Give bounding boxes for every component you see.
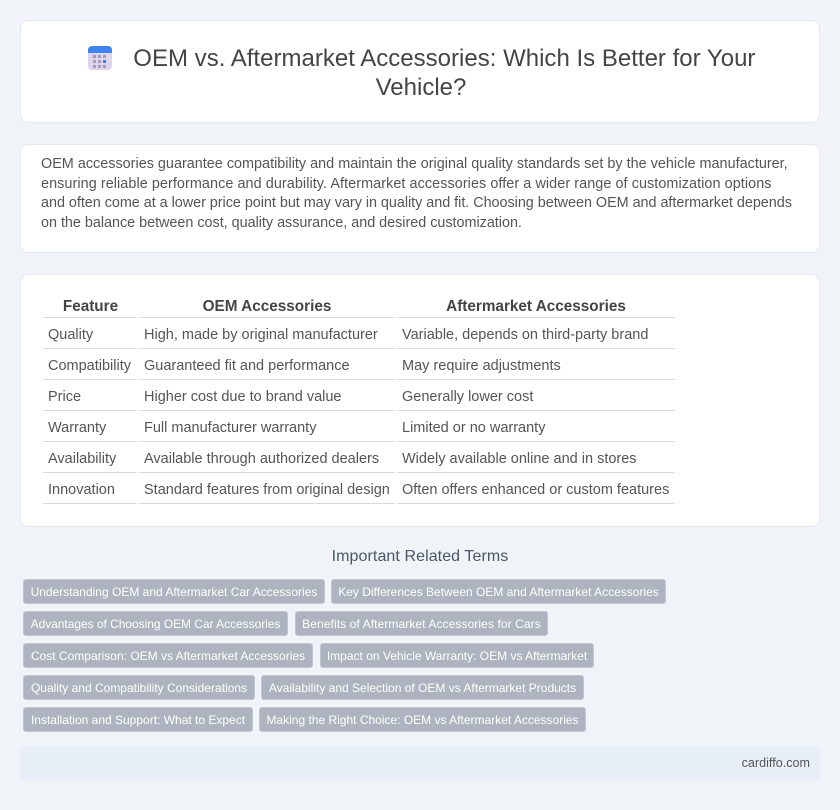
table: OEM vs aftermarket: Generally lower cost — [402, 389, 533, 405]
tag: Cost Comparison: OEM vs Aftermarket Accessories — [31, 649, 305, 663]
tag: Quality and Compatibility Considerations — [31, 681, 247, 695]
tag — [261, 675, 584, 700]
title: OEM vs. Aftermarket Accessories: Which Is Better for Your — [133, 45, 755, 72]
tag: Advantages of Choosing OEM Car Accessories — [31, 617, 280, 631]
tag — [23, 643, 313, 668]
tag — [320, 643, 594, 668]
tag — [23, 707, 253, 732]
table: OEM vs aftermarket: High, made by original manufacturer — [144, 327, 378, 343]
table: OEM vs aftermarket: Standard features from original design — [144, 482, 390, 498]
tag: Understanding OEM and Aftermarket Car Accessories — [31, 585, 317, 599]
tag list: related terms — [23, 579, 666, 732]
tag: Benefits of Aftermarket Accessories for Cars — [302, 617, 541, 631]
tag — [295, 611, 548, 636]
intro paragraph: and often come at a lower price point but may vary in quality and fit. Choosing between OEM and aftermarket depends — [41, 195, 792, 211]
footer source: cardiffo.com — [742, 756, 810, 770]
table: OEM vs aftermarket: Higher cost due to brand value — [144, 389, 342, 405]
footer bar — [20, 746, 820, 780]
row: availability: Availability — [48, 451, 116, 467]
tag — [23, 579, 325, 604]
icon: calendar grid — [88, 46, 112, 70]
tag: Installation and Support: What to Expect — [31, 713, 245, 727]
table header: Feature — [63, 298, 118, 315]
intro paragraph: ensuring reliable performance and durability. Aftermarket accessories offer a wider range of customization options — [41, 176, 772, 192]
table: OEM vs aftermarket: Guaranteed fit and performance — [144, 358, 350, 374]
panel: intro text — [20, 144, 820, 253]
table: OEM vs aftermarket: Variable, depends on third-party brand — [402, 327, 648, 343]
panel: comparison table — [20, 274, 820, 527]
table header: OEM Accessories — [203, 298, 331, 315]
table: OEM vs aftermarket: Full manufacturer warranty — [144, 420, 316, 436]
title — [133, 45, 755, 101]
table: OEM vs aftermarket: May require adjustments — [402, 358, 561, 374]
table: OEM vs aftermarket — [43, 298, 675, 504]
tag — [331, 579, 666, 604]
intro paragraph: on the balance between cost, quality assurance, and desired customization. — [41, 215, 522, 231]
row: price: Price — [48, 389, 81, 405]
intro paragraph — [41, 156, 792, 231]
table: OEM vs aftermarket: Often offers enhanced or custom features — [402, 482, 669, 498]
tag — [23, 611, 288, 636]
table: OEM vs aftermarket: Limited or no warranty — [402, 420, 545, 436]
table: OEM vs aftermarket: Available through authorized dealers — [144, 451, 379, 467]
table: OEM vs aftermarket: Widely available online and in stores — [402, 451, 637, 467]
panel: title card — [20, 20, 820, 123]
tag: Key Differences Between OEM and Aftermarket Accessories — [338, 585, 659, 599]
tag — [259, 707, 586, 732]
tag: Making the Right Choice: OEM vs Aftermarket Accessories — [266, 713, 579, 727]
table header — [63, 298, 626, 315]
row: innovation: Innovation — [48, 482, 115, 498]
row: warranty: Warranty — [48, 420, 106, 436]
tag: Availability and Selection of OEM vs Aftermarket Products — [269, 681, 576, 695]
tag — [23, 675, 255, 700]
title: Vehicle? — [376, 74, 466, 101]
heading: important related terms: Important Related Terms — [332, 548, 508, 565]
row: compatibility: Compatibility — [48, 358, 131, 374]
intro paragraph: OEM accessories guarantee compatibility and maintain the original quality standards set by the vehicle manufacturer, — [41, 156, 788, 172]
row: quality: Quality — [48, 327, 93, 343]
table header: Aftermarket Accessories — [446, 298, 626, 315]
tag: Impact on Vehicle Warranty: OEM vs Aftermarket — [327, 649, 587, 663]
